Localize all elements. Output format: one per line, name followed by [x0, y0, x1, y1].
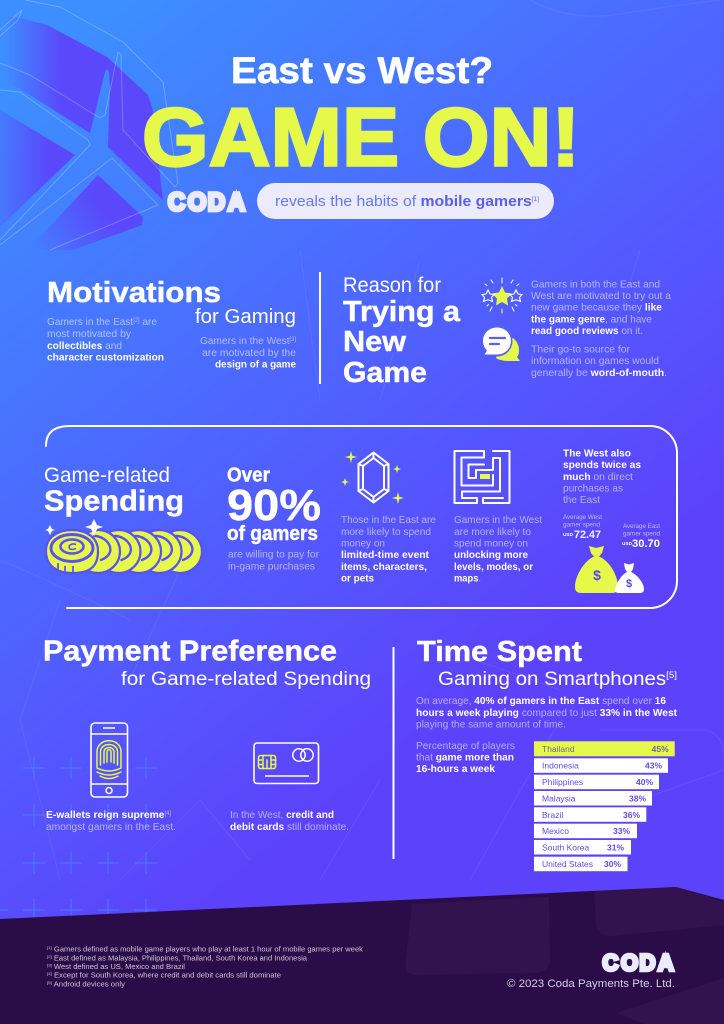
footnotes [47, 945, 364, 988]
reason body text: new game because they like [531, 302, 662, 314]
west spends twice text: the East [563, 494, 600, 506]
time spent heading: Gaming on Smartphones [438, 669, 649, 690]
west payment text: In the West, credit and [230, 809, 334, 821]
west spending text: levels, modes, or [454, 561, 533, 573]
reason heading: Game [343, 357, 427, 389]
icon: gem [341, 451, 404, 504]
icon: stars [482, 278, 522, 313]
west spending text [454, 514, 542, 584]
icon: money bags [575, 546, 644, 593]
reason heading [343, 274, 461, 389]
panel: reason for trying [343, 274, 671, 389]
bar: South Korea: 31% [607, 842, 624, 852]
bar chart [534, 741, 675, 871]
reason body text: the game genre, and have [531, 313, 652, 325]
east motivation text: collectibles and [47, 340, 122, 352]
title [142, 50, 580, 184]
footer [0, 887, 724, 1024]
reason body text: West are motivated to try out a [531, 290, 671, 302]
spending heading: Spending [44, 486, 184, 518]
icon: money bags: $ [593, 567, 601, 583]
average west spend: 72.47 [574, 529, 601, 541]
east motivation text [47, 316, 164, 364]
chart caption [416, 740, 515, 775]
west spends twice text: much on direct [563, 471, 633, 483]
stat: over 90% of gamers: of gamers [227, 523, 318, 545]
stat: over 90% of gamers: Over [227, 464, 270, 486]
motivations heading: for Gaming [195, 306, 296, 328]
west spends twice text: The West also [563, 448, 631, 460]
east payment text: E-wallets reign supreme [46, 809, 165, 821]
bar: Malaysia: 38% [629, 794, 646, 804]
bar: United States: United States [542, 859, 593, 869]
average west spend [563, 515, 602, 541]
footnotes: [1] [47, 945, 52, 950]
panel outline [46, 426, 677, 608]
bar: Mexico: Mexico [542, 826, 569, 836]
bar: Indonesia: 43% [645, 760, 662, 770]
east spending text: more likely to spend [341, 526, 431, 538]
icon: maze [454, 451, 510, 503]
reason heading: New [343, 326, 406, 358]
chart caption: 16-hours a week [416, 763, 495, 775]
bar: Mexico [534, 824, 637, 838]
west payment text: debit cards still dominate. [230, 821, 349, 833]
bar: Mexico: 33% [613, 826, 630, 836]
west spending text: Gamers in the West [454, 514, 542, 526]
decorative game controller [0, 0, 178, 250]
subtitle pill: reveals the habits of mobile gamers [275, 194, 523, 210]
reason body text [531, 278, 671, 379]
panel: game-related spending [44, 426, 677, 608]
crosshair pattern [0, 757, 157, 921]
bar: Thailand [534, 741, 675, 756]
time spent summary: hours a week playing compared to just 33% in the West [416, 707, 677, 719]
average west spend: Average West [563, 515, 602, 521]
average east spend: Average East [623, 524, 660, 530]
bar: Malaysia [534, 791, 652, 806]
stat: over 90% of gamers: are willing to pay for [228, 548, 319, 560]
east motivation text: are [140, 316, 157, 328]
west motivation text: [3] [290, 337, 296, 343]
west spends twice text [563, 448, 641, 506]
bar: South Korea [534, 840, 631, 854]
time spent summary: On average, 40% of gamers in the East spend over 16 [416, 695, 666, 707]
reason heading: Trying a [343, 296, 461, 328]
footnotes: Android devices only [52, 981, 126, 988]
subtitle pill: [1] [532, 197, 539, 203]
average east spend: 30.70 [632, 538, 660, 550]
bar: Thailand: Thailand [542, 744, 575, 754]
east spending text: Those in the East are [341, 514, 436, 526]
average east spend: USD [622, 541, 633, 546]
average west spend: USD [563, 532, 574, 537]
panel: time spent [416, 636, 677, 871]
east spending text [341, 514, 436, 584]
spending heading: Game-related [44, 464, 170, 487]
bar: Brazil: 36% [623, 810, 640, 820]
copyright: © 2023 Coda Payments Pte. Ltd. [507, 978, 675, 990]
subtitle pill [257, 183, 554, 219]
reason body text: generally be word-of-mouth. [531, 367, 667, 379]
east spending text: items, characters, [341, 561, 427, 573]
time spent summary: playing the same amount of time. [416, 718, 566, 730]
bar: Thailand: 45% [652, 744, 669, 754]
panel: payment preference [43, 636, 371, 833]
east payment text: amongst gamers in the East. [46, 821, 176, 833]
bar: Philippines: Philippines [542, 777, 583, 787]
motivations heading [47, 277, 296, 328]
reason heading: Reason for [343, 274, 441, 297]
title: East vs West? [231, 50, 493, 91]
east motivation text: most motivated by [47, 328, 132, 340]
west motivation text [200, 335, 296, 370]
east motivation text: [2] [133, 318, 140, 324]
east spending text: limited-time event [341, 549, 429, 561]
footnotes: Gamers defined as mobile game players who play at least 1 hour of mobile games per week [52, 947, 364, 954]
title: GAME ON! [142, 90, 580, 184]
chart caption: that game more than [416, 752, 514, 764]
footnotes: [2] [47, 954, 52, 959]
average west spend: gamer spend [563, 522, 600, 528]
west spends twice text: spends twice as [563, 459, 641, 471]
bar: Indonesia: Indonesia [542, 760, 579, 770]
icon: speech bubbles [482, 326, 520, 361]
time spent heading [417, 636, 677, 690]
average east spend: gamer spend [623, 532, 660, 538]
west spending text: unlocking more [454, 549, 528, 561]
west spending text: spend money on [454, 538, 528, 550]
bar: Philippines [534, 775, 659, 789]
icon: coins [45, 519, 202, 573]
footnotes: [3] [47, 962, 52, 968]
stat: over 90% of gamers: in-game purchases [228, 560, 315, 572]
payment heading: for Game-related Spending [121, 669, 371, 690]
footnotes: East defined as Malaysia, Philippines, Thailand, South Korea and Indonesia [52, 955, 307, 962]
east payment text [46, 809, 176, 833]
west motivation text: Gamers in the West [200, 335, 293, 347]
reason body text: information on games would [531, 355, 659, 367]
time spent heading: [5] [666, 670, 677, 680]
bar: Philippines: 40% [636, 777, 653, 787]
bar: United States: 30% [604, 859, 621, 869]
stat: over 90% of gamers [227, 464, 321, 572]
spending heading [44, 464, 184, 518]
average east spend [622, 524, 660, 550]
reason body text: Their go-to source for [531, 343, 630, 355]
bar: Brazil: Brazil [542, 810, 563, 820]
west spending text: are more likely to [454, 526, 531, 538]
time spent summary [416, 695, 677, 730]
footnotes: Except for South Korea, where credit and debit cards still dominate [52, 973, 281, 980]
footer coda logo: CODA [602, 950, 674, 975]
east motivation text: character customization [47, 352, 164, 364]
bar: South Korea: South Korea [542, 842, 590, 852]
icon: phone with fingerprint [91, 723, 128, 797]
chart caption: Percentage of players [416, 740, 515, 752]
west spending text: maps. [454, 572, 481, 584]
icon: credit card [254, 743, 318, 784]
payment heading [43, 636, 371, 690]
reason body text: Gamers in both the East and [531, 278, 660, 290]
east motivation text: Gamers in the East [47, 316, 137, 328]
bar: United States [534, 857, 628, 871]
icon: money bags: $ [626, 578, 632, 590]
bar: Brazil [534, 807, 646, 822]
footnotes: [4] [47, 971, 52, 976]
time spent heading: Time Spent [417, 636, 582, 668]
panel: motivations [47, 277, 296, 370]
coda logo: CODA [168, 189, 245, 216]
east spending text: or pets [341, 572, 374, 584]
west spends twice text: purchases as [563, 482, 623, 494]
stat: over 90% of gamers: 90% [227, 481, 321, 530]
east spending text: money on [341, 538, 385, 550]
motivations heading: Motivations [47, 277, 221, 309]
west payment text [230, 809, 349, 833]
footnotes: West defined as US, Mexico and Brazil [52, 964, 185, 971]
bar: Malaysia: Malaysia [542, 794, 576, 804]
east payment text: [4] [164, 811, 171, 817]
payment heading: Payment Preference [43, 636, 337, 668]
bar: Indonesia [534, 758, 668, 773]
footnotes: [5] [47, 980, 52, 985]
west motivation text: design of a game [215, 358, 296, 370]
west motivation text: are motivated by the [202, 347, 296, 359]
reason body text: read good reviews on it. [531, 325, 643, 337]
